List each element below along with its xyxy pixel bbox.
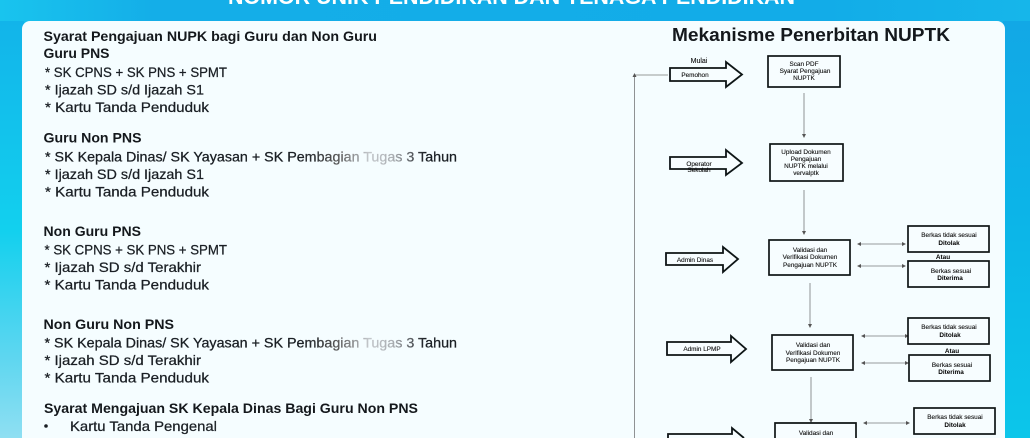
arrow: operator sekolah bbox=[670, 150, 742, 175]
arrow: dinas to diterima bbox=[857, 264, 906, 268]
text block: non guru non PNS bbox=[44, 316, 457, 386]
box: scan PDF bbox=[768, 56, 840, 87]
box: scan PDF: Scan PDF bbox=[789, 61, 819, 68]
box: ditolak 1: Berkas tidak sesuai bbox=[921, 232, 977, 239]
text block: guru non PNS: * SK Kepala Dinas/ SK Yayasan + SK Pembagian Tugas 3 Tahun bbox=[45, 148, 457, 164]
box: diterima 2: Diterima bbox=[938, 369, 964, 376]
box: validasi LPMP: Validasi dan bbox=[796, 342, 831, 349]
box: validasi dinas: Validasi dan bbox=[793, 247, 828, 254]
arrow: bottom role bbox=[668, 428, 744, 438]
text block: non guru PNS: * Kartu Tanda Penduduk bbox=[44, 276, 210, 292]
box: diterima 2: Berkas sesuai bbox=[932, 362, 972, 369]
arrow: operator sekolah: Sekolah bbox=[687, 167, 711, 174]
heading: mekanisme: Mekanisme Penerbitan NUPTK bbox=[672, 25, 950, 45]
box: upload dokumen bbox=[770, 144, 843, 181]
text block: non guru PNS: * Ijazah SD s/d Terakhir bbox=[44, 259, 201, 275]
box: validasi bottom bbox=[775, 423, 856, 438]
text block: non guru PNS: * SK CPNS + SK PNS + SPMT bbox=[44, 242, 227, 258]
box: ditolak 1 bbox=[908, 226, 989, 252]
box: diterima 1: Berkas sesuai bbox=[931, 268, 971, 275]
arrow: admin dinas bbox=[666, 247, 738, 272]
arrow: feedback line bbox=[632, 73, 668, 438]
text block: non guru non PNS: * Kartu Tanda Penduduk bbox=[44, 370, 210, 386]
box: validasi dinas: Verifikasi Dokumen bbox=[783, 254, 838, 261]
heading: syarat NUPK: Syarat Pengajuan NUPK bagi Guru dan Non Guru bbox=[44, 28, 377, 44]
box: scan PDF: NUPTK bbox=[793, 75, 816, 82]
list item: kartu tanda pengenal: Kartu Tanda Pengenal bbox=[70, 418, 217, 434]
text block: non guru non PNS: Non Guru Non PNS bbox=[44, 316, 174, 332]
arrow: pemohon: Mulai bbox=[691, 58, 708, 65]
arrow: down 1 bbox=[802, 93, 806, 138]
text block: guru non PNS: * Kartu Tanda Penduduk bbox=[45, 184, 210, 200]
text block: non guru non PNS: * SK Kepala Dinas/ SK Yayasan + SK Pembagian Tugas 3 Tahun bbox=[44, 334, 457, 350]
text block: guru PNS: Guru PNS bbox=[44, 45, 110, 61]
box: diterima 1: Diterima bbox=[937, 275, 963, 282]
text block: non guru PNS bbox=[44, 223, 227, 292]
heading: syarat SK kepala dinas: Syarat Mengajuan SK Kepala Dinas Bagi Guru Non PNS bbox=[44, 400, 418, 416]
arrow: down 2 bbox=[802, 190, 806, 235]
arrow: LPMP to diterima bbox=[861, 361, 909, 365]
box: diterima 2 bbox=[909, 355, 990, 381]
arrow: admin LPMP bbox=[667, 336, 746, 362]
arrow: dinas to ditolak bbox=[857, 242, 906, 246]
box: upload dokumen: Pengajuan bbox=[791, 156, 822, 163]
arrow: down 4 bbox=[809, 377, 813, 423]
box: validasi bottom: Validasi dan bbox=[799, 430, 834, 437]
box: ditolak 3: Berkas tidak sesuai bbox=[927, 414, 983, 421]
text block: guru PNS: * Kartu Tanda Penduduk bbox=[45, 99, 210, 115]
chart: flowchart bbox=[632, 56, 995, 438]
arrow: LPMP to ditolak bbox=[861, 334, 909, 338]
arrow: admin dinas: Admin Dinas bbox=[677, 257, 713, 264]
box: ditolak 3: Ditolak bbox=[944, 422, 966, 429]
text block: guru PNS: * Ijazah SD s/d Ijazah S1 bbox=[45, 82, 204, 98]
box: upload dokumen: vervalptk bbox=[793, 170, 820, 177]
text block: guru PNS: * SK CPNS + SK PNS + SPMT bbox=[45, 64, 227, 80]
text block: guru non PNS bbox=[44, 130, 457, 200]
box: validasi LPMP bbox=[772, 335, 853, 370]
box: diterima 1 bbox=[908, 261, 989, 287]
box: upload dokumen: NUPTK melalui bbox=[784, 163, 828, 170]
box: ditolak 2 bbox=[908, 318, 989, 344]
arrow: pemohon: Pemohon bbox=[681, 72, 709, 79]
box: ditolak 2: Berkas tidak sesuai bbox=[921, 324, 977, 331]
text block: non guru PNS: Non Guru PNS bbox=[44, 223, 141, 239]
arrow: pemohon bbox=[670, 58, 742, 87]
box: validasi LPMP: Verifikasi Dokumen bbox=[786, 350, 841, 357]
text block: guru non PNS: * Ijazah SD s/d Ijazah S1 bbox=[45, 166, 204, 182]
text block: guru non PNS: Guru Non PNS bbox=[44, 130, 142, 146]
text block: guru PNS bbox=[44, 45, 227, 115]
box: ditolak 1: Ditolak bbox=[938, 240, 960, 247]
box: ditolak 2: Ditolak bbox=[939, 332, 961, 339]
panel: syarat pengajuan text bbox=[44, 28, 457, 434]
arrow: operator sekolah: Operator bbox=[686, 161, 712, 168]
box: validasi dinas bbox=[769, 240, 850, 275]
box: validasi LPMP: Pengajuan NUPTK bbox=[786, 357, 841, 364]
arrow: bottom to ditolak bbox=[863, 421, 910, 425]
box: scan PDF: Syarat Pengajuan bbox=[780, 68, 831, 75]
arrow: admin LPMP: Admin LPMP bbox=[683, 346, 721, 353]
box: ditolak 3 bbox=[914, 408, 995, 434]
label: atau 1: Atau bbox=[936, 254, 950, 261]
label: atau 2: Atau bbox=[945, 348, 959, 355]
box: upload dokumen: Upload Dokumen bbox=[781, 149, 831, 156]
arrow: down 3 bbox=[808, 283, 812, 328]
box: validasi dinas: Pengajuan NUPTK bbox=[783, 262, 838, 269]
text block: non guru non PNS: * Ijazah SD s/d Terakhir bbox=[44, 352, 201, 368]
